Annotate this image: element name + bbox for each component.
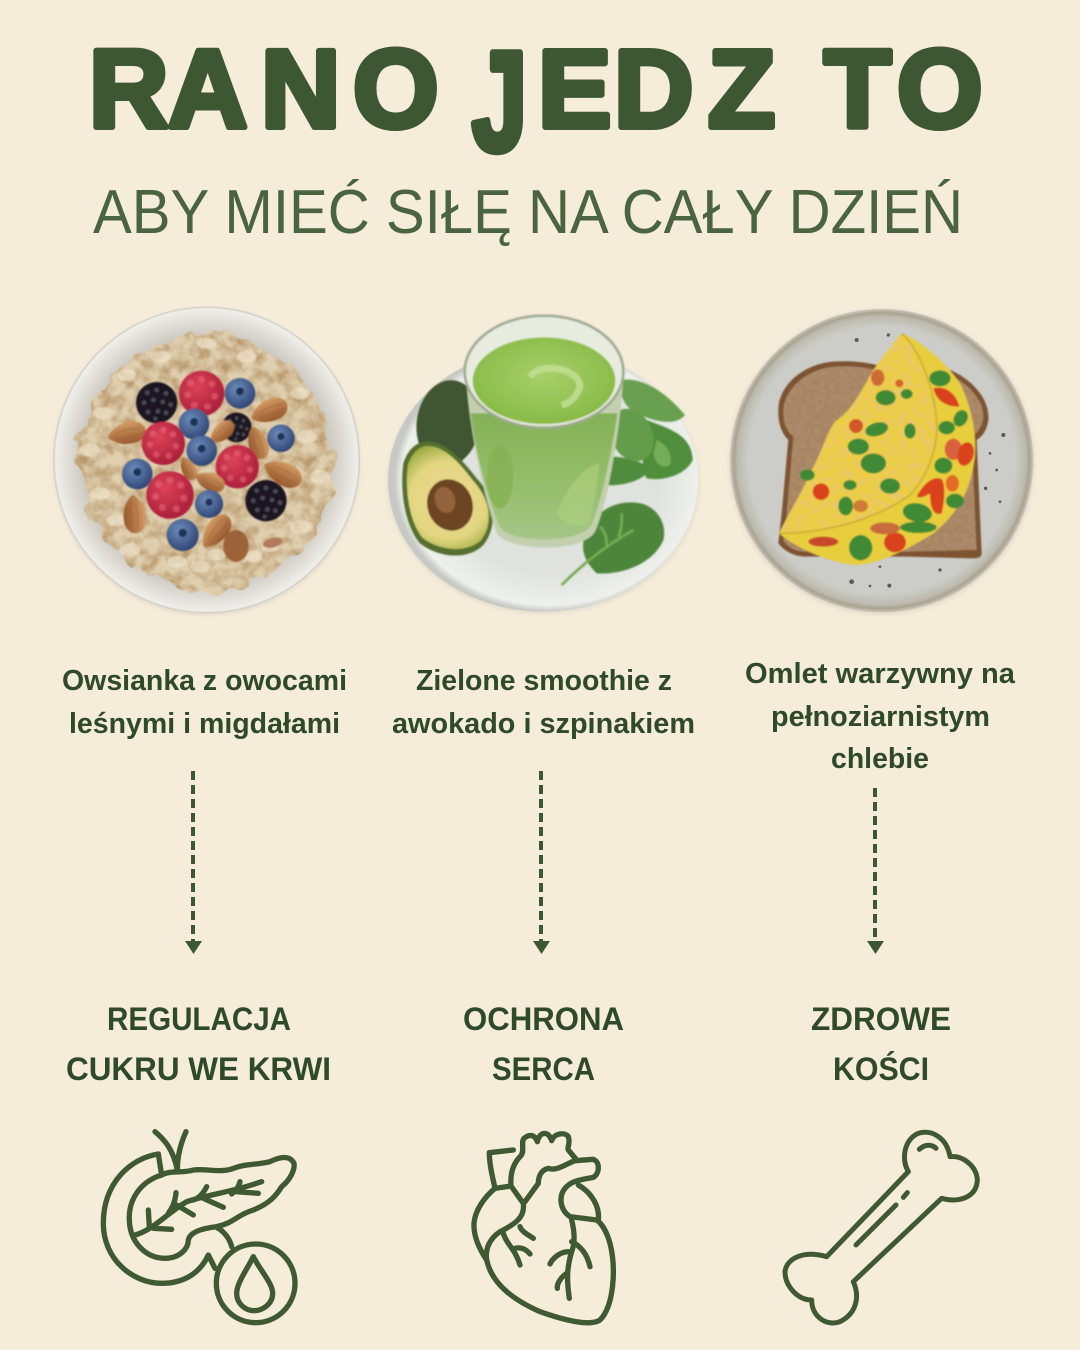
arrow: oatmeal to benefit (185, 771, 202, 954)
title (89, 23, 983, 180)
benefit: blood sugar regulation: CUKRU WE KRWI (66, 1051, 331, 1087)
peppers and herbs (800, 370, 971, 560)
benefit: blood sugar regulation: REGULACJA (107, 1001, 291, 1037)
arrow: smoothie to benefit (533, 771, 550, 954)
glass (466, 377, 623, 547)
toast (778, 361, 988, 558)
title: J (472, 23, 527, 180)
title: RANO (89, 28, 439, 151)
spinach leaves (605, 457, 650, 485)
title: TO (824, 28, 983, 151)
benefit: heart protection: OCHRONA (463, 1001, 624, 1037)
benefit: healthy bones: KOŚCI (833, 1051, 929, 1087)
label: smoothie: awokado i szpinakiem (392, 708, 695, 740)
title: EDZ (538, 28, 775, 151)
label: oatmeal: leśnymi i migdałami (69, 708, 340, 740)
omelette (779, 333, 975, 565)
icon: anatomical heart (474, 1133, 613, 1323)
photo: green smoothie plate (387, 316, 699, 614)
benefit: blood sugar regulation (66, 1001, 331, 1087)
arrow: omelette to benefit (867, 788, 884, 954)
label: omelette (745, 658, 1016, 775)
label: omelette: chlebie (831, 743, 929, 775)
benefit: healthy bones (811, 1001, 951, 1087)
icon: bone (785, 1132, 977, 1323)
benefit: healthy bones: ZDROWE (811, 1001, 951, 1037)
icon: pancreas with blood drop (103, 1132, 295, 1323)
label: omelette: Omlet warzywny na (745, 658, 1016, 690)
subtitle: ABY MIEĆ SIŁĘ NA CAŁY DZIEŃ (93, 178, 963, 247)
photo: vegetable omelette on toast (729, 309, 1034, 615)
photo: oatmeal bowl with berries and almonds (53, 307, 360, 615)
avocado half (402, 442, 493, 556)
label: oatmeal (62, 665, 347, 740)
whole avocado (411, 376, 486, 471)
label: oatmeal: Owsianka z owocami (62, 665, 347, 697)
label: smoothie: Zielone smoothie z (416, 665, 672, 697)
label: smoothie (392, 665, 695, 740)
label: omelette: pełnoziarnistym (771, 701, 990, 733)
benefit: heart protection: SERCA (492, 1051, 595, 1087)
benefit: heart protection (463, 1001, 624, 1087)
